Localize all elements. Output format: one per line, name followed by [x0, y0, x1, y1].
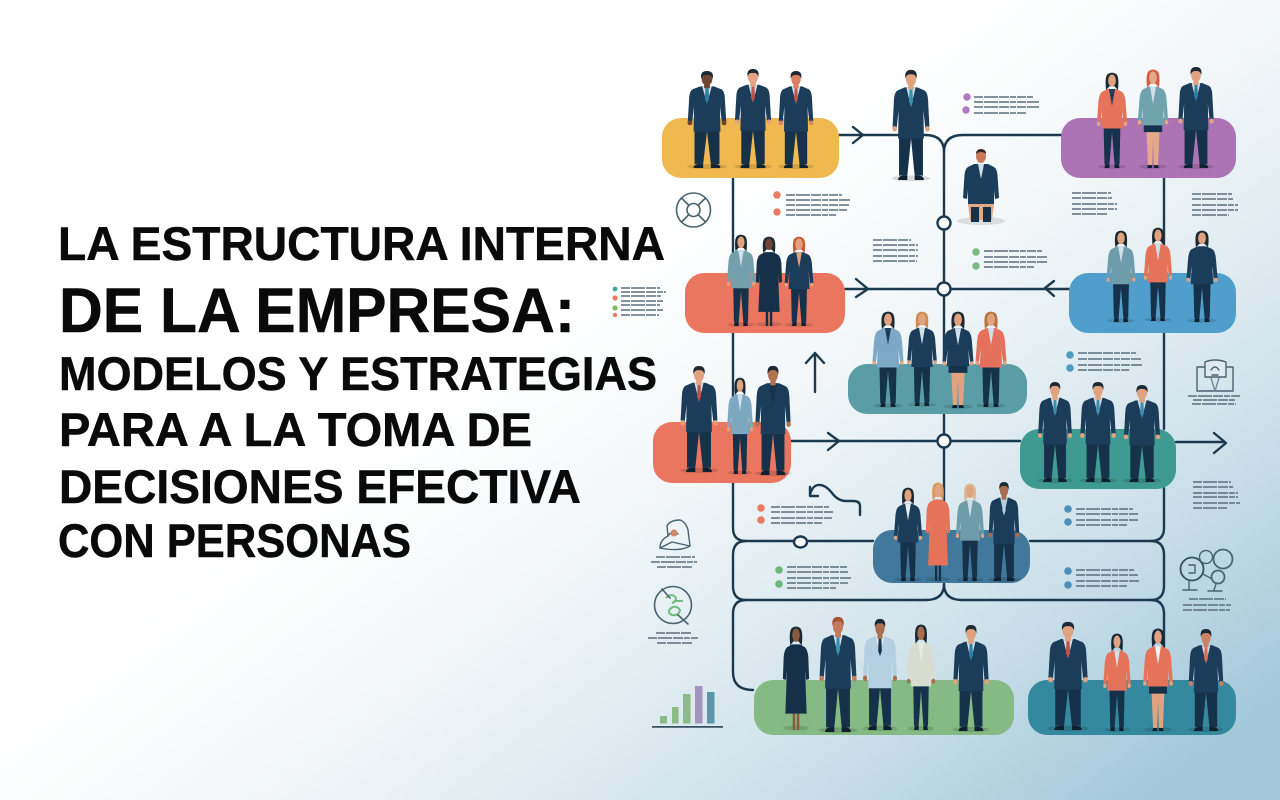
icon: presentation board	[1197, 360, 1233, 391]
title: PARA A LA TOMA DE	[59, 403, 532, 456]
person	[783, 626, 809, 730]
text block: under purple left	[1072, 193, 1117, 214]
person	[953, 625, 989, 732]
person	[755, 366, 791, 476]
node: middle circle	[938, 282, 950, 296]
person	[894, 488, 922, 582]
person	[1186, 231, 1218, 323]
title: LA ESTRUCTURA INTERNA	[58, 217, 665, 270]
text block: green bullets upper	[972, 248, 1047, 270]
person	[907, 312, 937, 407]
title: MODELOS Y ESTRATEGIAS	[59, 347, 657, 400]
icon: connected circles	[1180, 550, 1232, 591]
person	[1138, 70, 1168, 169]
person	[1123, 385, 1161, 483]
title: DE LA EMPRESA:	[59, 276, 575, 346]
panel: coral team upper	[685, 235, 845, 333]
caption: presentation board	[1188, 396, 1240, 404]
person	[1103, 634, 1131, 732]
person	[778, 71, 814, 169]
arrow: lower red to centre	[828, 433, 839, 450]
text block: far right	[1193, 482, 1240, 508]
icon: wheel	[676, 193, 710, 227]
person	[680, 366, 718, 473]
person	[1143, 628, 1173, 732]
arrow: yellow to centre	[853, 127, 863, 143]
person	[727, 235, 755, 327]
arrow: up	[806, 353, 824, 392]
icon: magnifier ring	[654, 586, 692, 624]
person	[756, 237, 782, 326]
text block: blue bullets bottom	[1064, 567, 1139, 589]
connector network	[733, 135, 1224, 690]
person	[907, 624, 935, 731]
person	[784, 237, 814, 327]
person	[942, 312, 974, 409]
panel: coral team lower	[653, 366, 791, 483]
text block: green bullets lower	[775, 566, 851, 588]
text block: coral bullets lower	[757, 504, 833, 524]
node: top circle	[938, 216, 950, 230]
arrow: exit right	[1214, 433, 1226, 453]
panel: yellow team	[662, 69, 839, 178]
caption: figure in circles	[651, 557, 697, 567]
arrow: blue to centre	[1045, 281, 1054, 296]
caption: connected circles	[1183, 599, 1231, 610]
title: CON PERSONAS	[58, 514, 411, 567]
person	[1047, 622, 1089, 731]
text block: purple bullets	[962, 93, 1039, 114]
person	[1097, 73, 1127, 169]
text block: legend near title	[612, 287, 666, 317]
person	[819, 617, 857, 733]
panel: teal team bottom	[1028, 622, 1236, 735]
panel: green team	[754, 617, 1014, 735]
person	[1037, 382, 1073, 483]
text block: coral bullets upper	[773, 191, 850, 216]
text block: centre left	[873, 240, 918, 261]
arrow: curved return	[810, 485, 860, 515]
title: DECISIONES EFECTIVA	[59, 460, 581, 513]
person: squat manager	[957, 149, 1005, 225]
panel: purple team	[1061, 67, 1236, 178]
person	[687, 71, 727, 169]
person	[1178, 67, 1214, 169]
person	[862, 619, 898, 731]
panel: teal team	[848, 312, 1027, 414]
person	[872, 312, 904, 408]
bar chart	[652, 686, 723, 728]
person	[734, 69, 772, 169]
text block: blue bullets middle	[1066, 351, 1142, 372]
caption: magnifier ring	[648, 633, 698, 643]
panel: blue team	[1069, 228, 1236, 333]
person	[926, 483, 950, 581]
node: lower circle	[938, 434, 950, 448]
person: director	[892, 70, 930, 181]
panel: green-teal team	[1020, 382, 1176, 489]
person	[975, 312, 1007, 408]
panel: dark blue team	[873, 482, 1030, 583]
person	[1080, 382, 1116, 483]
person	[1106, 231, 1136, 323]
text block: under purple right	[1192, 194, 1238, 215]
person	[727, 378, 753, 475]
person	[1188, 629, 1224, 732]
text block: blue bullets lower	[1064, 505, 1138, 526]
arrow: red to centre	[856, 279, 868, 297]
title	[58, 217, 665, 567]
person	[956, 484, 984, 582]
icon: figure in circles	[660, 520, 690, 550]
node: left circle	[794, 536, 807, 548]
person	[1144, 228, 1172, 322]
person	[988, 482, 1020, 582]
